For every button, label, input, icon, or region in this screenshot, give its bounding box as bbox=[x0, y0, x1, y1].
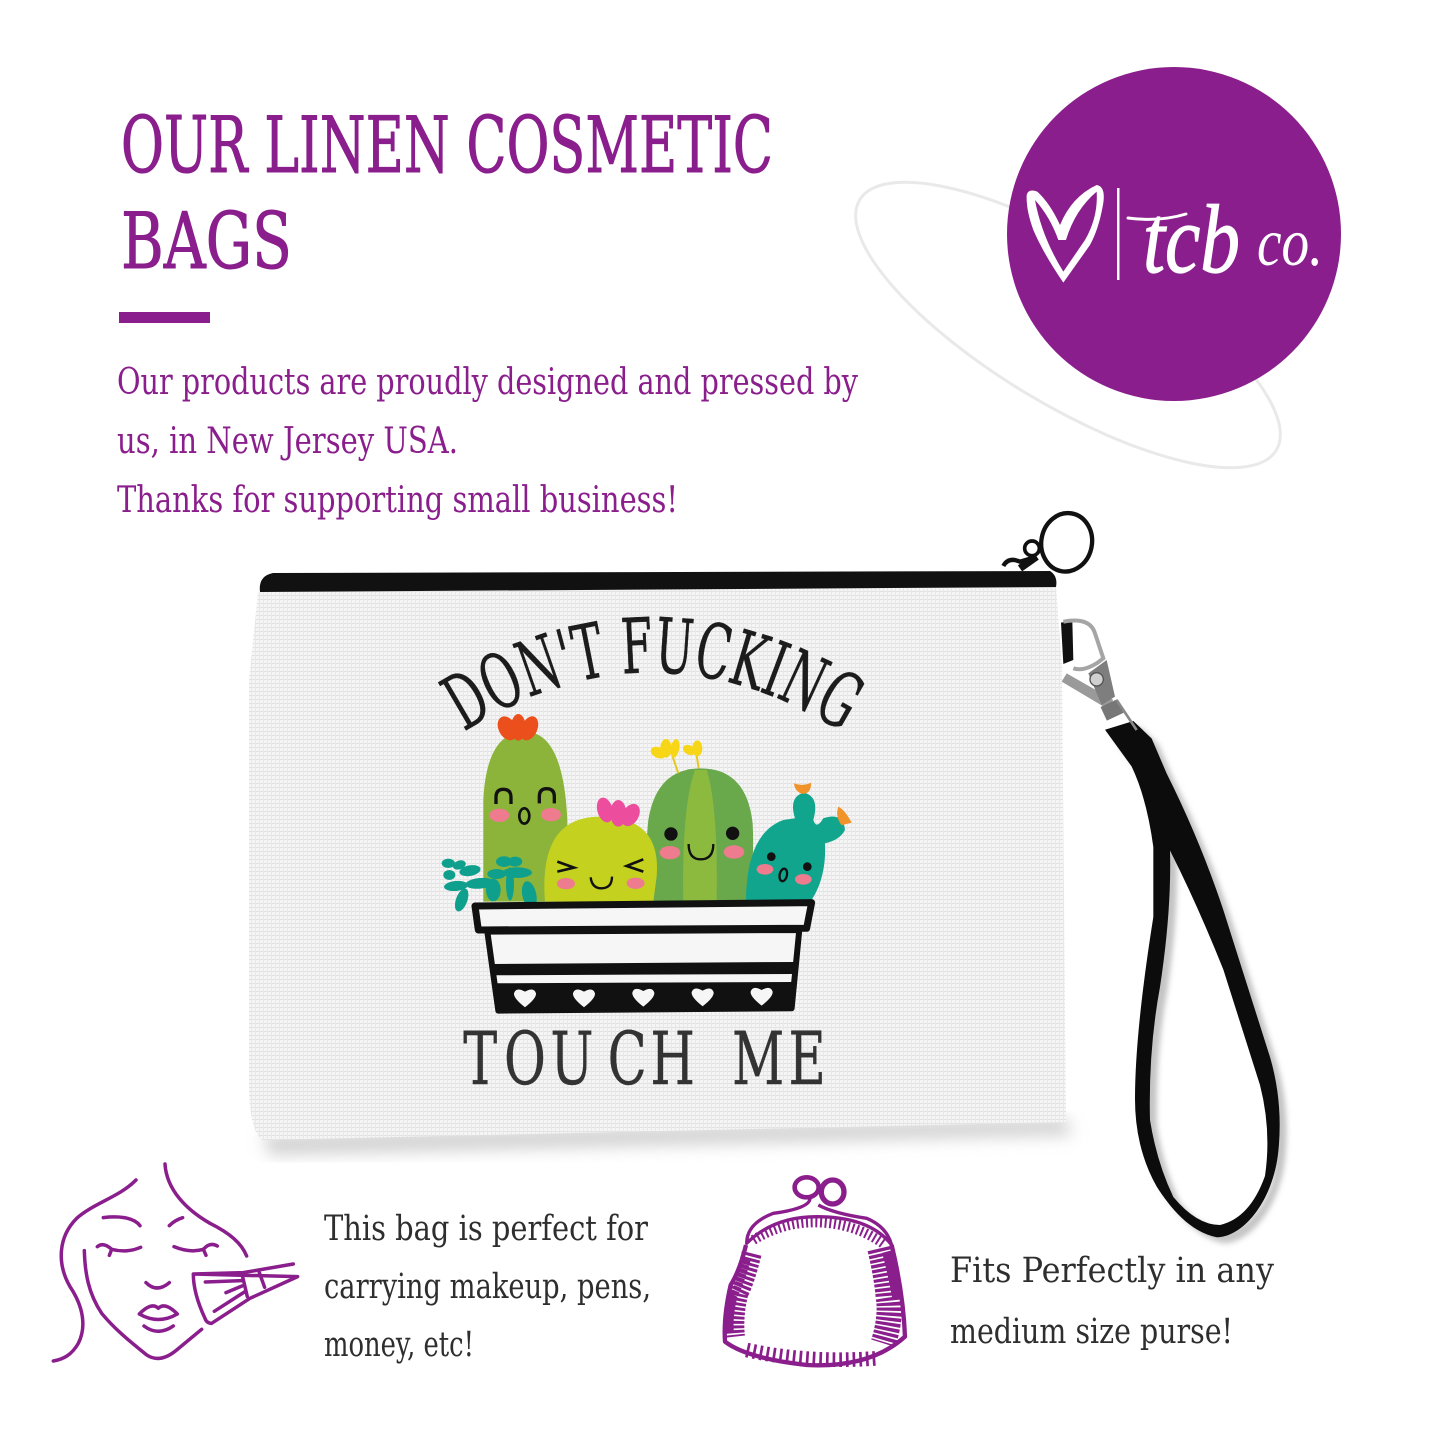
wrist strap shadow bbox=[1112, 727, 1287, 1243]
logo: tcb co.: tcb bbox=[1143, 186, 1240, 294]
printed line touch me: TOUCH ME bbox=[463, 1017, 826, 1101]
intro text block: Thanks for supporting small business! bbox=[117, 480, 678, 521]
text: bag uses: carrying makeup, pens, bbox=[324, 1267, 651, 1307]
intro text block: us, in New Jersey USA. bbox=[117, 421, 458, 462]
hearts on pot bbox=[514, 988, 773, 1007]
printed headline curved: DON'T FUCKING bbox=[438, 616, 864, 731]
icon: coin purse bbox=[725, 1177, 905, 1365]
intro text block: Our products are proudly designed and pressed by bbox=[117, 362, 859, 403]
text: bag uses: money, etc! bbox=[324, 1325, 474, 1365]
heading: our linen cosmetic bags: BAGS bbox=[121, 197, 292, 287]
text: fits in purse bbox=[950, 1251, 1274, 1352]
icon: face with makeup brush bbox=[53, 1164, 298, 1361]
bag shadow bbox=[262, 1118, 1072, 1155]
zipper bbox=[260, 571, 1056, 592]
text: bag uses: This bag is perfect for bbox=[324, 1209, 648, 1249]
product: linen bag bbox=[209, 510, 1290, 1284]
striped green cactus bbox=[647, 738, 753, 902]
text: bag uses bbox=[324, 1209, 651, 1365]
yellow round cactus bbox=[544, 796, 657, 902]
heading underline bbox=[119, 312, 210, 323]
key ring and zipper pull bbox=[1003, 509, 1097, 576]
logo: tcb co. bbox=[1007, 67, 1341, 401]
cactus illustration bbox=[442, 713, 852, 1011]
wrist strap bbox=[1105, 721, 1280, 1237]
printed headline curved bbox=[438, 616, 864, 731]
logo: tcb co.: co. bbox=[1257, 204, 1323, 280]
orbit ring behind logo bbox=[819, 131, 1317, 519]
bag body bbox=[249, 586, 1066, 1140]
heading: our linen cosmetic bags: OUR LINEN COSMETIC bbox=[121, 101, 773, 191]
tall green cactus bbox=[483, 713, 567, 902]
teal cactus bbox=[746, 783, 852, 900]
metal clasp bbox=[1061, 621, 1137, 730]
intro text block bbox=[117, 362, 859, 521]
planter pot bbox=[475, 903, 812, 1011]
text: fits in purse: medium size purse! bbox=[950, 1312, 1233, 1352]
text: fits in purse: Fits Perfectly in any bbox=[950, 1251, 1274, 1291]
heading: our linen cosmetic bags bbox=[121, 101, 773, 287]
small succulent leaves bbox=[442, 856, 539, 913]
